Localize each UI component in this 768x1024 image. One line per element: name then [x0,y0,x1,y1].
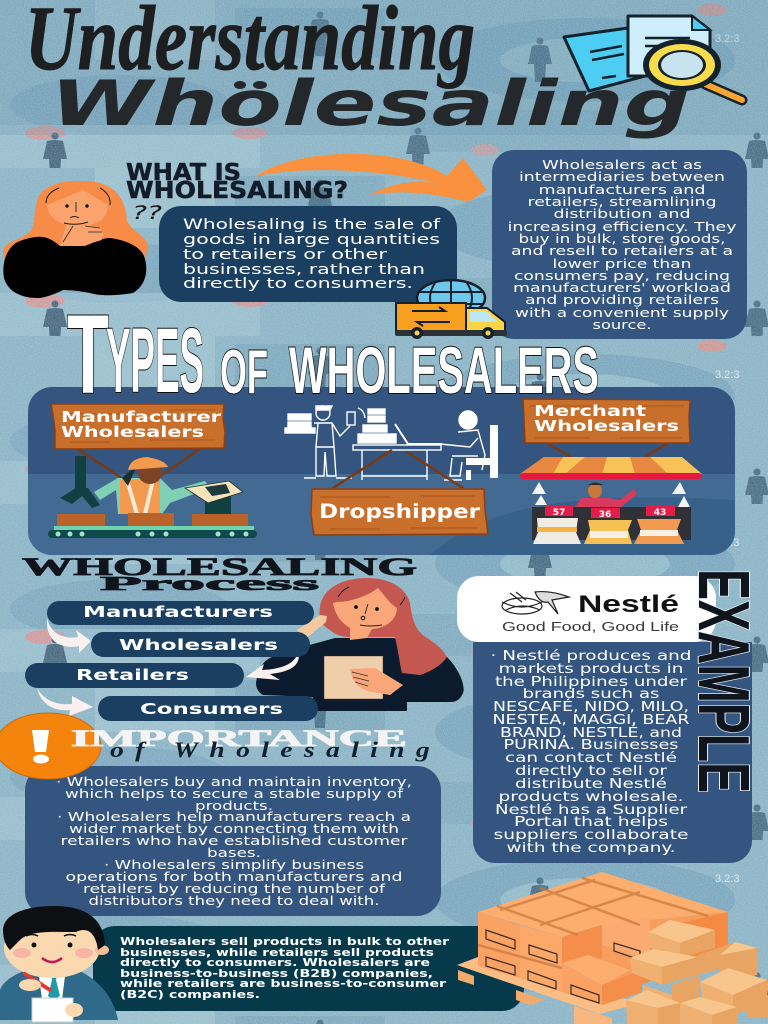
sign: merchant wholesalers: Merchant [534,402,647,420]
panel: role of wholesalers [492,150,747,339]
panel: importance text: operations for both manufacturers and [66,869,402,884]
panel: Nestle example text: can contact Nestlé [505,751,677,766]
heading: Types of wholesalers [67,292,599,417]
panel: role of wholesalers: distribution and [554,206,690,221]
panel: Nestle example text [473,642,752,863]
panel: Nestle example text: BRAND, NESTLÉ, and [500,725,682,741]
panel: importance text: · Wholesalers buy and maintain inventory, [56,774,412,789]
illustration: thinking woman [3,181,148,298]
heading: Importance of wholesaling: IMPORTANCE [71,726,407,751]
heading: What is wholesaling: WHOLESALING? [126,178,348,204]
panel: Nestle example text: NESTEA, MAGGI, BEAR [492,713,690,728]
struts: manufacturer sign [76,448,201,478]
panel: Nestle example text: markets products in [498,662,684,677]
sign: merchant wholesalers [523,399,690,443]
illustration: pallet of boxes [457,872,768,1024]
panel: definition: to retailers or other [183,247,387,263]
heading: Types of wholesalers: YPES [106,310,204,412]
illustration: market stall with prices: 57 [553,508,565,518]
vertical heading: Example: EXAMPLE [683,569,763,793]
panel: wholesale vs retail note: business-to-business (B2B) companies, [120,967,433,980]
panel: role of wholesalers: manufacturers and [538,182,706,197]
panel: Nestle example text: directly to sell or [515,764,668,779]
panel: wholesale vs retail note: businesses, while retailers sell products [120,946,434,959]
heading: Types of wholesalers: OF [220,338,268,407]
heading: Importance of wholesaling: of Wholesaling [110,737,441,762]
question marks: ?? [132,202,162,224]
panel: wholesale vs retail note [93,926,524,1011]
icon: delivery truck with globe [395,280,507,339]
panel: Nestle example text: · Nestlé produces and [490,649,692,664]
panel: importance text: retailers by reducing the number of [83,881,386,896]
process step: manufacturers [47,601,314,625]
panel: role of wholesalers: and resell to retailers at a [511,243,733,258]
panel: wholesale vs retail note: while retailers are business-to-consumer [120,977,447,990]
logo card: Nestle: Good Food, Good Life [502,620,679,634]
panel: importance text: bases. [207,845,261,860]
panel: Nestle example text: the Philippines under [495,675,688,690]
title: Wholesaling [50,67,690,140]
panel: Nestle example text: NESCAFÉ, NIDO, MILO, [493,699,689,715]
heading: Types of wholesalers: T [67,292,109,417]
panel: importance text: distributors they need to deal with. [88,893,380,908]
panel: Nestle example text: products wholesale. [498,790,684,805]
heading: Wholesaling process [22,554,417,595]
panel: role of wholesalers: lower price than [552,256,692,271]
heading: What is wholesaling: WHAT IS [126,160,241,186]
panel: role of wholesalers: and providing retailers [525,292,719,307]
illustration: market stall with prices: 43 [654,508,666,518]
panel: wholesale vs retail note: directly to consumers. Wholesalers are [120,956,430,969]
struts: dropshipper sign [333,450,463,488]
panel: importance text: which helps to secure a stable supply of [65,786,404,801]
panel: definition: goods in large quantities [183,232,440,248]
title: Wholesaling: Wholesaling [50,67,690,140]
illustration: market stall with prices [520,457,702,544]
sign: dropshipper [311,489,488,535]
process step: wholesalers: Wholesalers [119,636,278,654]
panel: types of wholesalers [28,387,735,555]
process step: retailers: Retailers [76,666,189,684]
arrows: process flow [37,618,299,716]
panel: Nestle example text: Portal that helps [514,815,668,830]
panel: role of wholesalers: buy in bulk, store goods, [518,231,726,246]
illustration: woman with notepad [256,578,464,711]
panel: definition: businesses, rather than [183,262,425,278]
panel: Nestle example text: distribute Nestlé [515,777,667,792]
icon: documents and magnifying glass [564,16,742,100]
panel: Nestle example text: with the company. [506,841,676,856]
illustration: businessman with notepad [0,906,118,1022]
panel: importance text: products. [195,798,273,813]
process step: retailers [25,663,244,688]
panel: role of wholesalers: retailers, streamlining [528,194,716,209]
panel: wholesale vs retail note: (B2C) companies. [120,988,260,1001]
panel: definition: Wholesaling is the sale of [183,217,441,233]
sign: manufacturer wholesalers: Manufacturer [61,408,221,426]
panel: definition: directly to consumers. [183,276,413,292]
panel: role of wholesalers: source. [592,317,652,332]
heading: Importance of wholesaling [71,726,441,762]
process step: manufacturers: Manufacturers [83,603,273,621]
sign: dropshipper: Dropshipper [319,500,480,523]
panel: role of wholesalers: Wholesalers act as [542,157,702,172]
icon: orange exclamation circle [0,713,101,779]
panel: importance text: wider market by connecting them with [69,821,399,836]
panel: role of wholesalers: consumers pay, reducing [514,268,730,283]
sign: manufacturer wholesalers: Wholesalers [61,423,204,441]
process step: wholesalers [91,632,310,657]
panel: role of wholesalers: manufacturers' workload [513,280,731,295]
panel: wholesale vs retail note: Wholesalers sell products in bulk to other [120,935,450,948]
panel: role of wholesalers: intermediaries between [519,169,725,184]
panel: importance text: · Wholesalers help manufacturers reach a [57,809,411,824]
illustration: market stall with prices: 36 [599,510,611,520]
panel: importance text: retailers who have established customer [60,833,409,848]
logo card: Nestle [457,576,716,642]
panel: Nestle example text: suppliers collaborate [494,828,689,843]
illustration: dropshipping line art [285,406,498,480]
panel: importance text [25,766,441,916]
panel: Nestle example text: brands such as [522,687,660,702]
process step: consumers [98,696,318,721]
illustration: factory worker on conveyor [48,456,257,538]
panel: Nestle example text: Nestlé has a Supplier [495,803,688,818]
logo card: Nestle: Nestlé [578,591,679,618]
heading: Wholesaling process: WHOLESALING [22,554,417,581]
sign: manufacturer wholesalers [51,404,225,449]
panel: role of wholesalers: with a convenient supply [515,305,730,320]
arrow: orange curved [255,154,487,202]
panel: importance text: · Wholesalers simplify business [104,857,364,872]
panel: definition [159,206,457,302]
struts: merchant sign [547,443,668,457]
panel: Nestle example text: PURINA. Businesses [504,738,679,753]
heading: Wholesaling process: Process [100,573,320,595]
panel: role of wholesalers: increasing efficiency. They [508,219,737,234]
sign: merchant wholesalers: Wholesalers [534,417,679,435]
heading: What is wholesaling [126,160,348,204]
process step: consumers: Consumers [140,700,283,718]
